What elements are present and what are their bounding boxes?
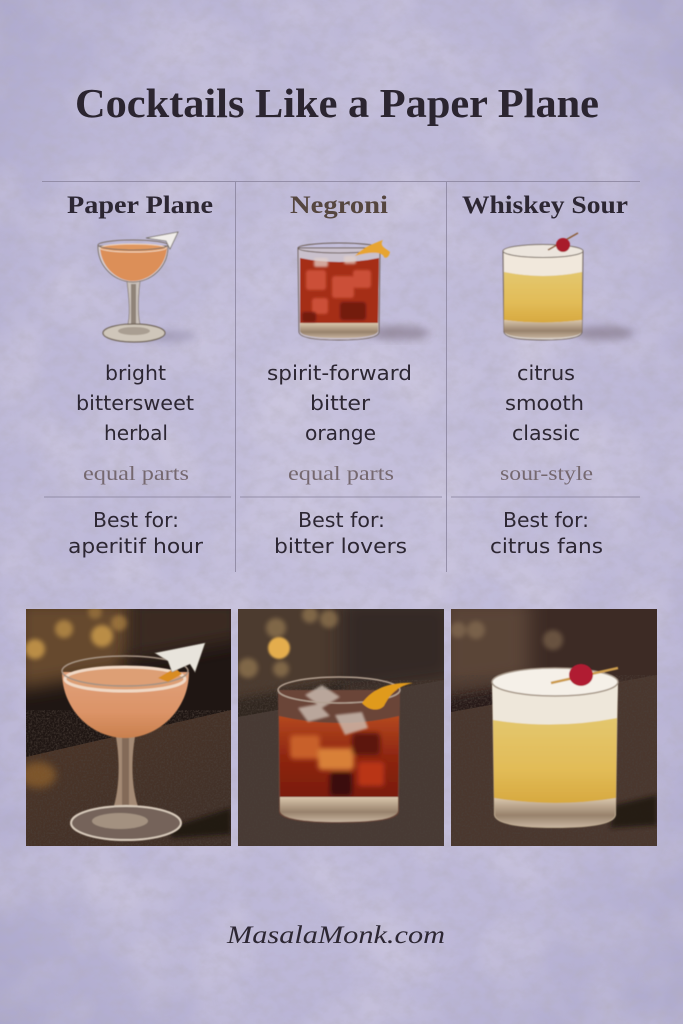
tasting notes: smooth	[505, 391, 584, 415]
tasting notes: classic	[512, 421, 580, 445]
icon: coupe glass with paper plane	[98, 232, 197, 342]
best for: aperitif hour	[68, 534, 204, 558]
style note: equal parts	[83, 463, 189, 485]
style note: sour-style	[500, 463, 593, 485]
best for: Best for:	[93, 508, 179, 532]
tasting notes	[505, 361, 584, 445]
heading: Paper Plane: Paper Plane	[67, 192, 213, 219]
best for: bitter lovers	[274, 534, 407, 558]
title: Cocktails Like a Paper Plane	[75, 80, 599, 126]
heading: Whiskey Sour: Whiskey Sour	[462, 192, 628, 219]
tasting notes: bittersweet	[76, 391, 194, 415]
tasting notes: herbal	[104, 421, 168, 445]
panel: Paper Plane comparison column	[67, 192, 213, 558]
tasting notes: bitter	[310, 391, 371, 415]
photo: Negroni cocktail	[238, 609, 444, 846]
panel: Negroni comparison column	[267, 192, 430, 558]
panel: Whiskey Sour comparison column	[462, 192, 634, 558]
tasting notes	[76, 361, 194, 445]
tasting notes: bright	[105, 361, 166, 385]
style note: equal parts	[288, 463, 394, 485]
best for	[68, 508, 204, 558]
best for: citrus fans	[490, 534, 603, 558]
best for: Best for:	[298, 508, 385, 532]
icon: rocks glass with whiskey sour	[503, 233, 634, 340]
tasting notes: spirit-forward	[267, 361, 412, 385]
tasting notes: citrus	[517, 361, 575, 385]
photo: Whiskey Sour cocktail	[441, 599, 657, 846]
icon: rocks glass with negroni	[298, 240, 430, 340]
photo: Paper Plane cocktail	[26, 609, 231, 846]
best for: Best for:	[503, 508, 589, 532]
best for	[490, 508, 603, 558]
tasting notes	[267, 361, 412, 445]
footer brand: MasalaMonk.com	[226, 922, 445, 949]
heading: Negroni: Negroni	[290, 192, 388, 219]
tasting notes: orange	[305, 421, 376, 445]
best for	[274, 508, 407, 558]
